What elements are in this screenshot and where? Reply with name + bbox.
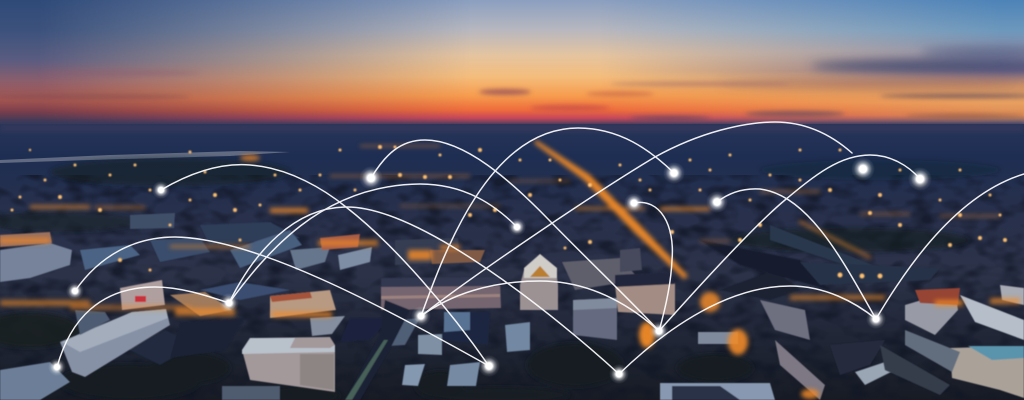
dark roof texture <box>0 175 1024 400</box>
buildings left <box>0 213 372 400</box>
buildings right <box>880 285 1024 398</box>
building: central tower <box>222 337 335 400</box>
buildings centre <box>310 238 530 400</box>
building: white temple roof <box>520 254 558 310</box>
city lights <box>10 145 1007 278</box>
sky <box>0 0 1024 128</box>
buildings centre-right <box>562 225 940 400</box>
city ground <box>0 124 1024 400</box>
dark trees and foreground shade <box>0 158 1000 400</box>
network arcs <box>57 122 1024 374</box>
network nodes <box>48 157 932 384</box>
orange street glow <box>0 140 1020 399</box>
